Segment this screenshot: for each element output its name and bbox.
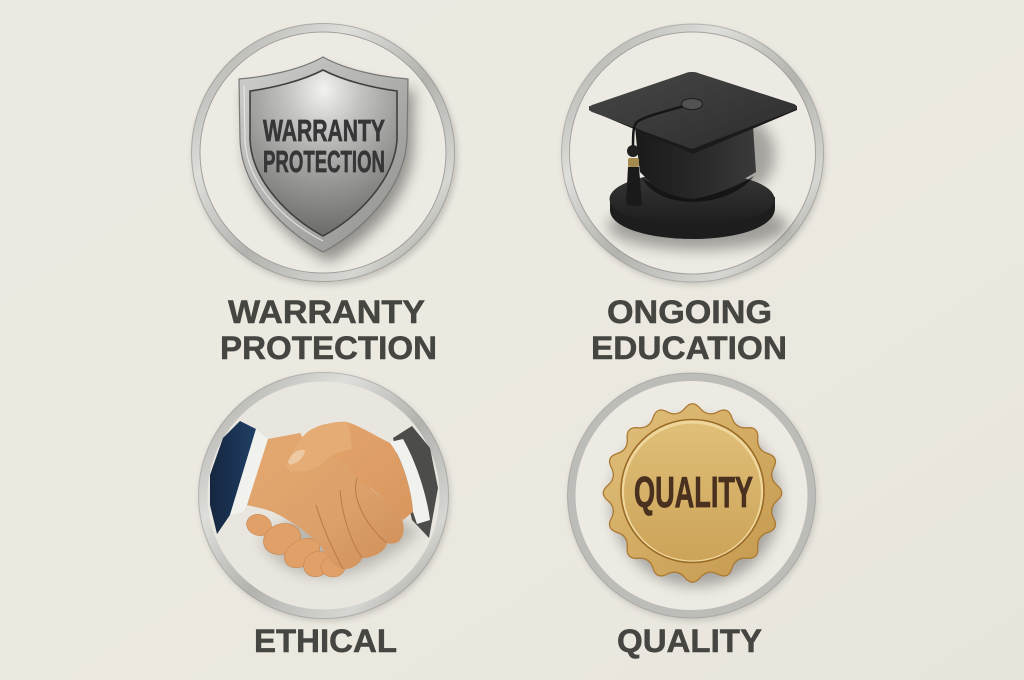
lower fingers <box>244 512 345 582</box>
left cuff <box>230 429 268 515</box>
shield text: PROTECTION <box>263 144 385 179</box>
thumbnail <box>288 450 305 465</box>
finger creases <box>316 478 387 569</box>
tassel <box>626 98 702 206</box>
seal inner disc <box>621 420 764 562</box>
shield text: WARRANTY <box>263 113 385 148</box>
icon: graduation cap <box>589 72 797 250</box>
right cuff <box>390 439 430 524</box>
label: ongoing education: EDUCATION <box>591 330 787 366</box>
label: ethical: ETHICAL <box>254 623 397 659</box>
right sleeve <box>393 426 438 538</box>
panel: ethical <box>198 372 448 659</box>
ring: ethical <box>198 372 448 618</box>
thumb <box>287 422 352 472</box>
ring: warranty <box>192 24 454 282</box>
seal text: QUALITY <box>634 468 753 517</box>
cap base disc <box>610 172 775 239</box>
right hand <box>288 422 413 520</box>
ring: quality <box>568 373 816 618</box>
label: warranty protection: WARRANTY <box>228 294 425 330</box>
icon: gold seal <box>603 404 782 586</box>
cap body <box>635 126 756 199</box>
label: ongoing education: ONGOING <box>607 294 772 330</box>
shield text <box>263 113 385 179</box>
panel: ongoing education <box>562 24 824 366</box>
icon: handshake <box>210 421 438 582</box>
icon: silver shield <box>239 57 414 262</box>
seal scalloped edge <box>603 404 782 582</box>
label: ongoing education <box>591 294 787 366</box>
label: warranty protection: PROTECTION <box>220 330 437 366</box>
ring: education <box>562 24 824 282</box>
left hand <box>247 433 404 569</box>
label: warranty protection <box>220 294 437 366</box>
panel: quality <box>568 373 816 659</box>
cap board <box>589 72 797 154</box>
label: quality: QUALITY <box>617 623 762 659</box>
panel: warranty protection <box>192 24 454 366</box>
left sleeve <box>210 421 256 534</box>
